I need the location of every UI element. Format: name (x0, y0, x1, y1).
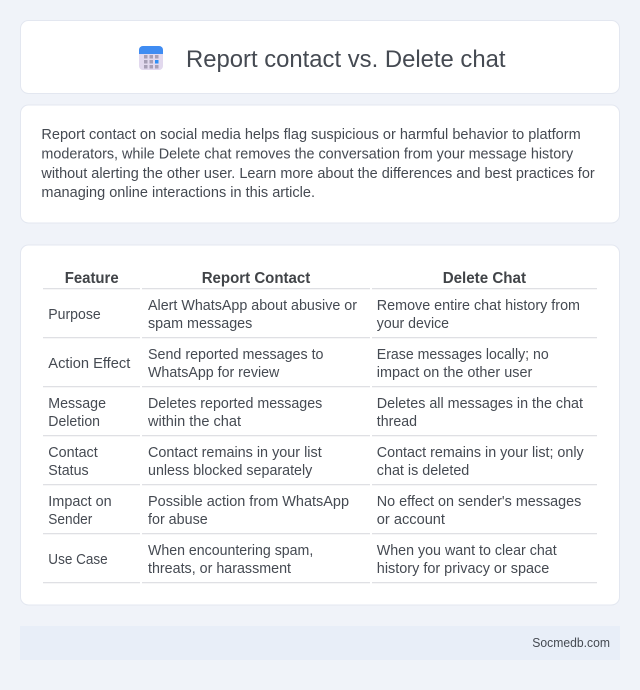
table row: Message Deletion: thread (377, 414, 417, 430)
table row: Contact Status: chat is deleted (377, 463, 469, 479)
table row: Impact on Sender: Sender (48, 512, 92, 528)
table row: Message Deletion: within the chat (147, 414, 241, 430)
panel: introduction text (20, 105, 620, 223)
table row: Use Case (43, 543, 597, 583)
table row: Use Case: When you want to clear chat (377, 543, 557, 559)
intro paragraph: without alerting the other user. Learn more about the differences and best practices for (40, 166, 595, 182)
table row: Contact Status (43, 445, 597, 485)
intro paragraph: managing online interactions in this article. (41, 185, 315, 201)
table row: Action Effect: Send reported messages to (148, 347, 324, 363)
table row: Purpose: spam messages (148, 316, 252, 332)
icon: calendar (139, 46, 163, 70)
table row: Impact on Sender: or account (377, 512, 445, 528)
table row: Contact Status: unless blocked separately (148, 463, 313, 479)
intro paragraph (40, 127, 595, 201)
table row: Purpose: Remove entire chat history from (377, 298, 580, 314)
table row: Action Effect: WhatsApp for review (148, 365, 280, 381)
table header row: Feature (65, 270, 119, 287)
panel: title card (20, 20, 620, 94)
table row: Use Case: threats, or harassment (148, 561, 291, 577)
table row: Message Deletion: Deletes reported messages (148, 396, 322, 412)
table row: Message Deletion: Deletes all messages in the chat (377, 396, 583, 412)
intro paragraph: moderators, while Delete chat removes the conversation from your message history (41, 146, 574, 162)
table row: Purpose: Purpose (48, 307, 101, 323)
table row: Message Deletion (43, 396, 597, 436)
table row: Contact Status: Contact remains in your list (148, 445, 322, 461)
table row: Message Deletion: Message (48, 396, 106, 412)
table row: Impact on Sender: Impact on (48, 494, 112, 510)
table header row (43, 270, 597, 289)
table row: Impact on Sender: for abuse (148, 512, 208, 528)
table row: Purpose (43, 298, 597, 338)
title: Report contact vs. Delete chat (186, 46, 506, 73)
table row: Purpose: Alert WhatsApp about abusive or (148, 298, 357, 314)
panel: comparison table (20, 245, 620, 605)
table row: Use Case: Use Case (48, 552, 108, 568)
table row: Impact on Sender: No effect on sender's messages (377, 494, 581, 510)
table row: Contact Status: Status (48, 463, 89, 479)
table header row: Report Contact (202, 270, 311, 287)
footer bar (20, 626, 620, 660)
table row: Action Effect: impact on the other user (377, 365, 533, 381)
table row: Impact on Sender: Possible action from WhatsApp (148, 494, 349, 510)
table header row: Delete Chat (443, 270, 527, 287)
table row: Action Effect: Action Effect (48, 356, 130, 372)
intro paragraph: Report contact on social media helps flag suspicious or harmful behavior to platform (41, 127, 581, 143)
table row: Purpose: your device (377, 316, 449, 332)
table row: Use Case: When encountering spam, (148, 543, 313, 559)
table row: Contact Status: Contact (48, 445, 98, 461)
table row: Use Case: history for privacy or space (377, 561, 549, 577)
table row: Contact Status: Contact remains in your list; only (377, 445, 584, 461)
table row: Action Effect (43, 347, 597, 387)
table row: Impact on Sender (43, 494, 597, 534)
table row: Action Effect: Erase messages locally; no (377, 347, 549, 363)
footer source text: Socmedb.com (532, 636, 610, 650)
table row: Message Deletion: Deletion (48, 414, 100, 430)
